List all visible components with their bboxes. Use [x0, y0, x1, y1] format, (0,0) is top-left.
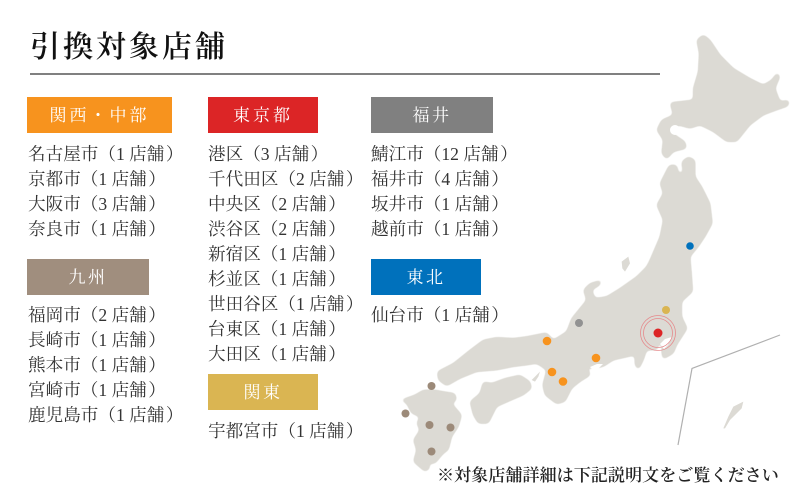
store list: Kansai Chubu: 京都市（1 店舗）	[28, 169, 166, 189]
Kyushu	[401, 390, 462, 472]
heading: Kanto: 関東	[244, 383, 282, 402]
store list: Tokyo: 大田区（1 店舗）	[208, 344, 346, 364]
store list: Fukui: 坂井市（1 店舗）	[371, 194, 509, 214]
Sado island	[622, 257, 630, 272]
store list: Tokyo: 新宿区（1 店舗）	[208, 244, 346, 264]
heading: Tohoku: 東北	[406, 268, 446, 287]
store list: Fukui	[371, 144, 518, 239]
heading: Kanto	[208, 374, 318, 410]
panel: Tokyo	[208, 97, 363, 364]
store list: Kansai Chubu	[28, 144, 183, 239]
heading: Kyushu	[27, 259, 149, 295]
heading: Tokyo: 東京都	[233, 106, 293, 125]
store list: Kansai Chubu: 奈良市（1 店舗）	[28, 219, 166, 239]
Uchiura bay	[670, 125, 680, 135]
Ise bay	[590, 364, 603, 369]
footnote: ※対象店舗詳細は下記説明文をご覧ください	[437, 466, 779, 485]
heading: Fukui	[371, 97, 493, 133]
Awaji island	[532, 372, 540, 382]
heading: Kyushu: 九州	[68, 268, 108, 287]
store list: Kansai Chubu: 大阪市（3 店舗）	[28, 194, 166, 214]
Shikoku	[470, 375, 532, 423]
Okinawa islands	[723, 402, 743, 428]
inset divider line	[678, 335, 780, 445]
store list: Kyushu: 熊本市（1 店舗）	[28, 355, 166, 375]
store list: Tokyo: 渋谷区（2 店舗）	[208, 219, 346, 239]
store list: Tohoku: 仙台市（1 店舗）	[371, 305, 509, 325]
Tokyo marker with rings	[640, 316, 676, 350]
store list: Tokyo: 千代田区（2 店舗）	[208, 169, 363, 189]
store list: Tokyo	[208, 144, 363, 364]
store list: Tokyo: 世田谷区（1 店舗）	[208, 294, 363, 314]
panel: Kyushu	[27, 259, 183, 425]
store location dots	[402, 242, 694, 456]
heading: Tohoku	[371, 259, 481, 295]
store list: Kyushu: 宮崎市（1 店舗）	[28, 380, 166, 400]
store list: Kyushu: 長崎市（1 店舗）	[28, 330, 166, 350]
heading: Kansai Chubu: 関西・中部	[50, 106, 150, 125]
panel: Kanto	[208, 374, 363, 441]
store list: Kansai Chubu: 名古屋市（1 店舗）	[28, 144, 183, 164]
Honshu	[437, 157, 712, 404]
store list: Fukui: 鯖江市（12 店舗）	[371, 144, 518, 164]
title rule	[30, 73, 660, 75]
store list: Tokyo: 杉並区（1 店舗）	[208, 269, 346, 289]
panel: Fukui	[371, 97, 518, 239]
store list: Kyushu: 福岡市（2 店舗）	[28, 305, 166, 325]
Hokkaido	[657, 35, 789, 159]
store list: Kanto: 宇都宮市（1 店舗）	[208, 421, 363, 441]
store list: Tokyo: 台東区（1 店舗）	[208, 319, 346, 339]
heading: Fukui: 福井	[412, 106, 452, 125]
title: 引換対象店舗	[30, 31, 228, 64]
Tokyo bay	[660, 337, 672, 349]
store list: Fukui: 福井市（4 店舗）	[371, 169, 509, 189]
heading: Tokyo	[208, 97, 318, 133]
store list: Tokyo: 中央区（2 店舗）	[208, 194, 346, 214]
heading: Kansai Chubu	[27, 97, 172, 133]
store list: Tokyo: 港区（3 店舗）	[208, 144, 328, 164]
store list: Fukui: 越前市（1 店舗）	[371, 219, 509, 239]
store list: Kyushu	[28, 305, 183, 425]
panel: Tohoku	[371, 259, 509, 325]
store list: Kyushu: 鹿児島市（1 店舗）	[28, 405, 183, 425]
panel: Kansai Chubu	[27, 97, 183, 239]
